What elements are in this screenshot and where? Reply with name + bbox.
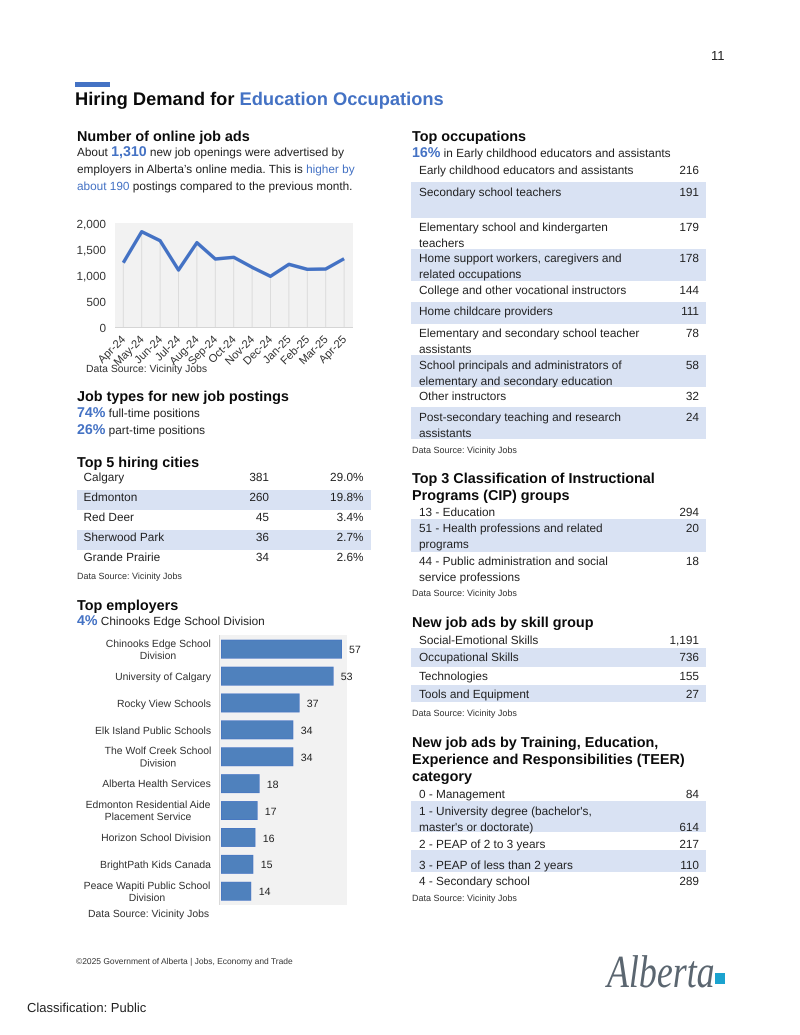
- table: CIP groups: 51 - Health professions and related: [419, 521, 603, 535]
- bar chart: top employers: 34: [301, 725, 313, 737]
- table: top occupations: School principals and administrators of: [419, 358, 622, 372]
- table: top occupations: Home support workers, caregivers and: [419, 251, 622, 265]
- table: TEER categories: 0 - Management: [419, 787, 505, 801]
- table: top occupations: Early childhood educators and assistants: [419, 163, 633, 177]
- table: skill groups: [411, 632, 706, 702]
- line chart: online job ads by month: Feb-25: [279, 334, 312, 367]
- table: CIP groups: [411, 505, 706, 584]
- table: top occupations: Secondary school teachers: [419, 184, 561, 198]
- bar chart: top employers: 15: [261, 859, 273, 871]
- bar chart: top employers: Placement Service: [105, 812, 192, 823]
- table: CIP groups: 13 - Education: [419, 505, 495, 519]
- heading: TEER category: category: [412, 769, 472, 785]
- table: TEER categories: [411, 787, 706, 888]
- line chart: online job ads by month: May-24: [112, 334, 147, 369]
- table: top occupations: 58: [686, 358, 699, 372]
- table: skill groups: 736: [679, 650, 699, 664]
- bar chart: top employers: 53: [341, 671, 353, 683]
- table: top 5 hiring cities: Sherwood Park: [84, 530, 164, 544]
- bar chart: top employers: Data Source: Vicinity Jobs: [88, 909, 209, 920]
- bar chart: top employers: 16: [263, 833, 275, 845]
- bar chart: top employers: 34: [301, 752, 313, 764]
- bar chart: top employers: 14: [259, 886, 271, 898]
- table: top occupations: teachers: [419, 236, 464, 250]
- table: top occupations: assistants: [419, 426, 471, 440]
- line chart: online job ads by month: Dec-24: [241, 334, 275, 368]
- table: TEER categories: 110: [680, 858, 699, 872]
- table: top 5 hiring cities: 381: [249, 470, 269, 484]
- text: full-time share: 74% full-time positions: [77, 405, 200, 421]
- text: top occupation share: 16% in Early childhood educators and assistants: [412, 145, 671, 161]
- bar chart: top employers: Division: [140, 758, 176, 770]
- table: skill groups: Social-Emotional Skills: [419, 632, 538, 646]
- table: CIP groups: 44 - Public administration and social: [419, 554, 608, 568]
- bar chart: top employers: Division: [140, 651, 176, 662]
- table: top occupations: Other instructors: [419, 389, 506, 403]
- text: top employer share: 4% Chinooks Edge School Division: [77, 613, 265, 629]
- line chart: online job ads by month: 1,000: [76, 269, 106, 283]
- table: top 5 hiring cities: 29.0%: [330, 470, 364, 484]
- heading: job types: Job types for new job postings: [77, 389, 289, 405]
- line chart: online job ads by month: [76, 217, 353, 375]
- heading: TEER category: New job ads by Training, Education,: [412, 735, 658, 751]
- table: top 5 hiring cities: 19.8%: [330, 490, 364, 504]
- line chart: online job ads by month: Mar-25: [297, 334, 331, 367]
- bar chart: top employers: Peace Wapiti Public School: [84, 881, 210, 892]
- table: top 5 hiring cities: Edmonton: [84, 490, 137, 504]
- source note: Data Source: Vicinity Jobs: [412, 708, 517, 718]
- source note: Data Source: Vicinity Jobs: [412, 588, 517, 598]
- bar chart: top employers: 18: [267, 779, 279, 791]
- heading: top occupations: Top occupations: [412, 129, 526, 145]
- table: skill groups: Technologies: [419, 669, 488, 683]
- table: skill groups: 27: [686, 686, 699, 700]
- source note: Data Source: Vicinity Jobs: [412, 445, 517, 455]
- table: TEER categories: 84: [686, 787, 699, 801]
- line chart: online job ads by month: Jul-24: [153, 334, 183, 364]
- bar chart: top employers: Division: [129, 893, 165, 904]
- bar chart: top employers: Horizon School Division: [101, 833, 211, 844]
- heading: top employers: Top employers: [77, 598, 178, 614]
- line chart: online job ads by month: 1,500: [76, 243, 106, 257]
- title: Hiring Demand for Education Occupations: [75, 88, 444, 109]
- table: top occupations: 144: [679, 283, 699, 297]
- line chart: online job ads by month: Apr-24: [96, 334, 128, 366]
- table: top occupations: College and other vocational instructors: [419, 283, 626, 297]
- table: top occupations: 111: [681, 304, 699, 318]
- heading: TEER category: [412, 735, 685, 785]
- bar chart: top employers: 37: [307, 698, 319, 710]
- table: TEER categories: 2 - PEAP of 2 to 3 years: [419, 837, 545, 851]
- line chart: online job ads by month: Jun-24: [132, 334, 165, 366]
- table: top 5 hiring cities: Red Deer: [84, 510, 134, 524]
- bar chart: top employers: 17: [265, 806, 277, 818]
- line chart: online job ads by month: 2,000: [76, 217, 106, 231]
- table: top occupations: Elementary and secondary school teacher: [419, 326, 639, 340]
- table: top 5 hiring cities: 2.7%: [337, 530, 364, 544]
- bar chart: top employers: Chinooks Edge School: [106, 639, 211, 650]
- table: TEER categories: 289: [679, 874, 699, 888]
- table: top occupations: Post-secondary teaching and research: [419, 410, 621, 424]
- heading: top 5 hiring cities: Top 5 hiring cities: [77, 455, 199, 471]
- table: top occupations: 78: [686, 326, 699, 340]
- table: TEER categories: 614: [679, 820, 699, 834]
- bar chart: top employers: The Wolf Creek School: [105, 746, 211, 757]
- table: top 5 hiring cities: 36: [256, 530, 269, 544]
- table: top 5 hiring cities: 34: [256, 550, 269, 564]
- line chart: online job ads by month: Apr-25: [317, 334, 349, 366]
- table: top occupations: related occupations: [419, 267, 521, 281]
- footer copyright: ©2025 Government of Alberta | Jobs, Economy and Trade: [76, 956, 293, 966]
- text: job openings summary: About 1,310 new job openings were advertised by: [77, 144, 344, 160]
- text: job openings summary: employers in Alberta’s online media. This is higher by: [77, 162, 355, 176]
- bar chart: top employers: 57: [349, 644, 361, 656]
- table: CIP groups: 18: [686, 554, 699, 568]
- line chart: online job ads by month: 500: [86, 295, 106, 309]
- table: skill groups: 155: [679, 669, 699, 683]
- heading: skill group: New job ads by skill group: [412, 615, 594, 631]
- table: top occupations: 32: [686, 389, 699, 403]
- page number: 11: [711, 48, 724, 63]
- table: top 5 hiring cities: 45: [256, 510, 269, 524]
- panel: job types: [77, 389, 289, 438]
- line chart: online job ads by month: Jan-25: [261, 334, 294, 366]
- table: CIP groups: service professions: [419, 570, 520, 584]
- bar chart: top employers: [84, 635, 361, 920]
- text: part-time share: 26% part-time positions: [77, 422, 205, 438]
- logo: Alberta: Alberta: [607, 946, 715, 997]
- table: CIP groups: programs: [419, 537, 469, 551]
- table: top occupations: [411, 163, 706, 440]
- source note: Data Source: Vicinity Jobs: [412, 893, 517, 903]
- table: TEER categories: master's or doctorate): [419, 820, 533, 834]
- line chart: online job ads by month: Aug-24: [168, 334, 202, 368]
- table: TEER categories: 3 - PEAP of less than 2 years: [419, 858, 573, 872]
- table: TEER categories: 4 - Secondary school: [419, 874, 530, 888]
- bar chart: top employers: Rocky View Schools: [117, 699, 211, 710]
- heading: TEER category: Experience and Responsibilities (TEER): [412, 752, 685, 768]
- table: top occupations: 178: [679, 251, 699, 265]
- bar chart: top employers: Edmonton Residential Aide: [86, 800, 211, 811]
- line chart: online job ads by month: Data Source: Vicinity Jobs: [86, 364, 207, 375]
- heading: top 3 CIP groups: [412, 471, 655, 504]
- table: top 5 hiring cities: [77, 470, 371, 564]
- panel: number of online job ads: [77, 129, 355, 193]
- table: top occupations: 191: [679, 184, 699, 198]
- table: top occupations: 179: [679, 220, 699, 234]
- heading: number of online job ads: Number of online job ads: [77, 129, 250, 145]
- table: skill groups: Occupational Skills: [419, 650, 519, 664]
- bar chart: top employers: BrightPath Kids Canada: [100, 860, 211, 871]
- table: top 5 hiring cities: 260: [249, 490, 269, 504]
- table: top occupations: 24: [686, 410, 699, 424]
- table: TEER categories: 217: [679, 837, 699, 851]
- table: top occupations: Elementary school and kindergarten: [419, 220, 608, 234]
- source note: Data Source: Vicinity Jobs: [77, 571, 182, 581]
- table: top occupations: Home childcare providers: [419, 304, 553, 318]
- bar chart: top employers: Alberta Health Services: [102, 779, 211, 790]
- table: skill groups: Tools and Equipment: [419, 686, 529, 700]
- title accent bar: [75, 82, 110, 87]
- table: top occupations: 216: [679, 163, 699, 177]
- classification label: Classification: Public: [27, 1000, 146, 1015]
- bar chart: top employers: Elk Island Public Schools: [95, 726, 211, 737]
- table: skill groups: 1,191: [669, 632, 699, 646]
- table: TEER categories: 1 - University degree (bachelor's,: [419, 804, 592, 818]
- table: top 5 hiring cities: Calgary: [84, 470, 124, 484]
- line chart: online job ads by month: Sep-24: [186, 334, 220, 368]
- text: job openings summary: [77, 144, 355, 193]
- bar chart: top employers: University of Calgary: [115, 672, 212, 683]
- table: top 5 hiring cities: 3.4%: [337, 510, 364, 524]
- table: top occupations: assistants: [419, 342, 471, 356]
- line chart: online job ads by month: 0: [99, 321, 106, 335]
- table: CIP groups: 294: [679, 505, 699, 519]
- table: top occupations: elementary and secondary education: [419, 374, 612, 388]
- line chart: online job ads by month: Nov-24: [223, 334, 257, 368]
- line chart: online job ads by month: Oct-24: [206, 334, 239, 366]
- table: top 5 hiring cities: 2.6%: [337, 550, 364, 564]
- text: job openings summary: about 190 postings compared to the previous month.: [77, 179, 352, 193]
- table: top 5 hiring cities: Grande Prairie: [84, 550, 160, 564]
- heading: top 3 CIP groups: Programs (CIP) groups: [412, 488, 570, 504]
- heading: top 3 CIP groups: Top 3 Classification of Instructional: [412, 471, 655, 487]
- table: CIP groups: 20: [686, 521, 699, 535]
